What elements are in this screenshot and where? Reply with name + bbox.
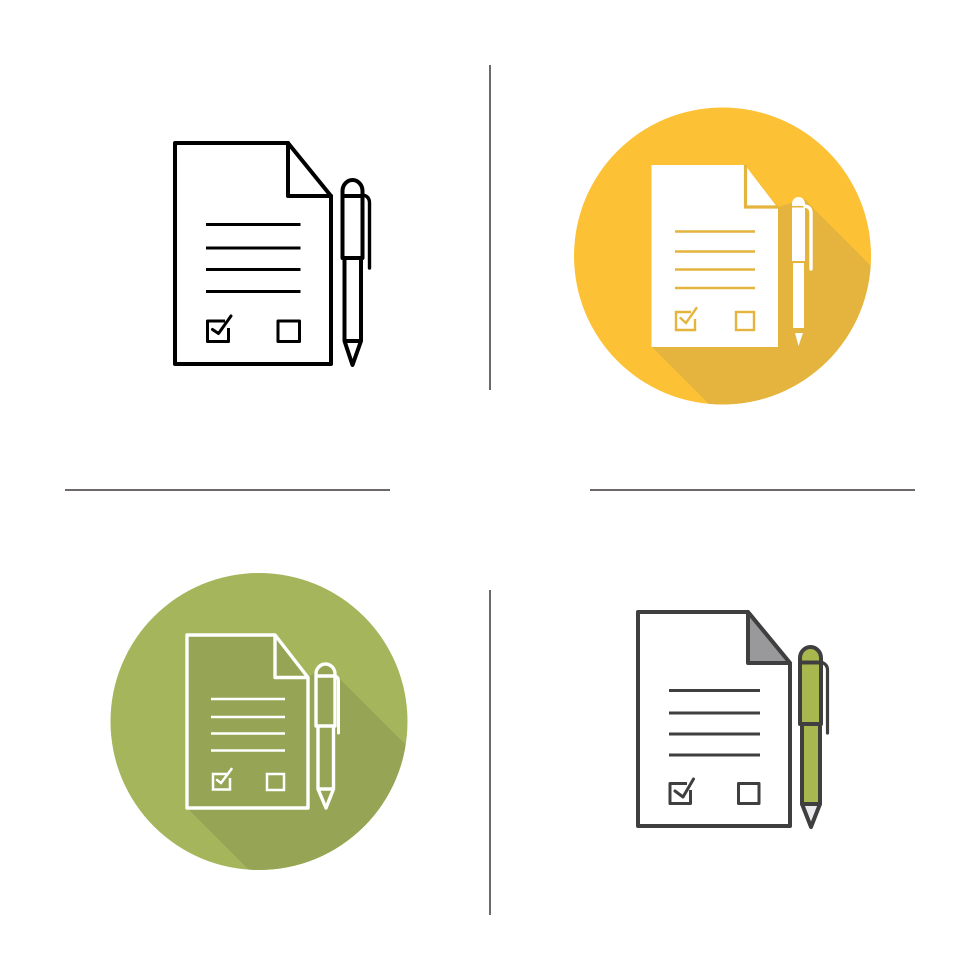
- pen clip: [805, 206, 811, 269]
- pen clip: [821, 662, 828, 733]
- text lines: [675, 232, 755, 288]
- icon: outline black document and pen: [175, 143, 370, 365]
- text lines: [211, 699, 285, 750]
- empty box: [736, 312, 754, 330]
- text lines: [669, 690, 760, 755]
- grey folded corner: [748, 612, 790, 663]
- long shadow: [652, 171, 871, 404]
- long shadow: [190, 666, 406, 870]
- document sheet: [187, 635, 308, 808]
- checked box: [670, 784, 690, 804]
- pen: [342, 180, 362, 365]
- pen: [792, 197, 811, 346]
- checked box: [213, 774, 230, 790]
- yellow circle: [574, 108, 871, 404]
- check mark: [217, 769, 232, 783]
- document sheet: [638, 612, 790, 826]
- folded corner: [746, 165, 778, 207]
- icon set: document and pen in four styles: [65, 65, 915, 915]
- checked box: [208, 321, 228, 342]
- folded corner: [288, 143, 331, 196]
- icon: colour filled document and pen: [638, 612, 828, 827]
- empty box: [267, 774, 284, 790]
- green circle: [110, 573, 408, 870]
- text lines: [206, 224, 300, 292]
- document sheet: [652, 165, 778, 347]
- check mark: [675, 779, 694, 797]
- folded corner: [275, 635, 308, 678]
- check mark: [680, 308, 696, 323]
- pen clip: [362, 195, 370, 268]
- icon: yellow flat circle with long shadow: [574, 108, 880, 415]
- empty box: [738, 784, 759, 804]
- checked box: [676, 312, 695, 330]
- check mark: [212, 316, 231, 334]
- pen clip: [335, 676, 338, 733]
- icon: green flat circle with long shadow: [110, 573, 420, 881]
- document sheet: [175, 143, 331, 364]
- green pen: [800, 647, 821, 724]
- empty box: [278, 321, 300, 342]
- pen: [316, 664, 338, 808]
